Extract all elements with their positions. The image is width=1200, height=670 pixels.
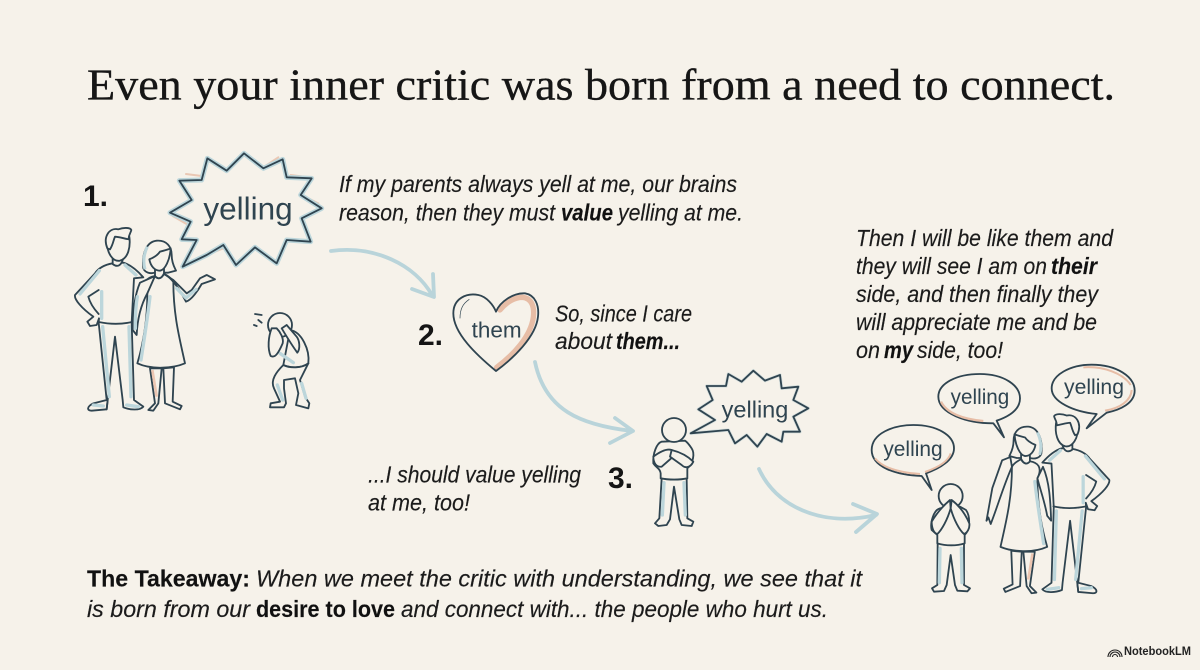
speech bubble: man: [1052, 365, 1135, 428]
burst: yelling: [170, 153, 322, 267]
burst: yelling small: yelling: [722, 397, 788, 423]
final family illustration: [872, 365, 1135, 593]
takeaway: [87, 566, 863, 622]
speech bubble: woman: yelling: [951, 386, 1009, 409]
takeaway: When we meet the critic with understanding, we see that it: [256, 566, 863, 592]
burst: yelling: yelling: [203, 190, 293, 226]
step 2 number: 2.: [418, 319, 443, 352]
takeaway: and connect with... the people who hurt us.: [401, 596, 828, 622]
crying child: [254, 313, 309, 408]
arrow: step 2 to step 3: [535, 362, 633, 443]
step 4 text: [856, 225, 1114, 363]
heart: them: [453, 293, 538, 371]
step 2 text: them...: [616, 328, 680, 354]
step 4 text: will appreciate me and be: [856, 309, 1097, 335]
child: [653, 418, 693, 526]
step 3 text: ...I should value yelling: [368, 462, 581, 488]
step 2 text: So, since I care: [555, 300, 692, 326]
step 1 text: [339, 171, 743, 226]
step 3 number: 3.: [608, 462, 633, 495]
man: [75, 228, 143, 411]
burst: yelling small: [691, 371, 808, 447]
speech bubble: child: yelling: [883, 438, 943, 461]
step 4 text: Then I will be like them and: [856, 225, 1114, 251]
child with yelling burst: [653, 371, 808, 526]
speech bubble: man: yelling: [1064, 376, 1124, 399]
family yelling illustration: [75, 153, 322, 411]
step 1 text: If my parents always yell at me, our brains: [339, 171, 737, 197]
arrow: step 3 to family: [759, 469, 877, 532]
speech bubble: child: [872, 425, 954, 490]
NotebookLM watermark: NotebookLM: [1124, 644, 1191, 658]
step 2 text: about: [555, 328, 613, 354]
step 3 text: [368, 462, 581, 516]
man: [1042, 414, 1109, 593]
woman: [133, 241, 215, 411]
step 2 text: [555, 300, 692, 354]
takeaway: is born from our: [87, 596, 251, 622]
takeaway: desire to love: [256, 596, 395, 622]
step 4 text: their: [1051, 253, 1099, 279]
step 4 text: on: [856, 337, 880, 363]
woman: [986, 427, 1051, 593]
step 1 text: reason, then they must: [339, 200, 556, 226]
step 3 text: at me, too!: [368, 490, 470, 516]
step 1 number: 1.: [83, 180, 108, 213]
heart: them: them: [472, 317, 522, 342]
speech bubble: woman: [938, 374, 1020, 437]
step 4 text: side, too!: [917, 337, 1003, 363]
step 4 text: my: [884, 337, 915, 363]
step 1 text: value: [561, 200, 613, 226]
step 1 text: yelling at me.: [616, 200, 743, 226]
child covering mouth: [931, 484, 970, 592]
title: Even your inner critic was born from a need to connect.: [87, 60, 1115, 110]
takeaway: The Takeaway:: [87, 566, 250, 592]
step 4 text: they will see I am on: [856, 253, 1047, 279]
step 4 text: side, and then finally they: [856, 281, 1099, 307]
arrow: step 1 to step 2: [331, 250, 434, 297]
